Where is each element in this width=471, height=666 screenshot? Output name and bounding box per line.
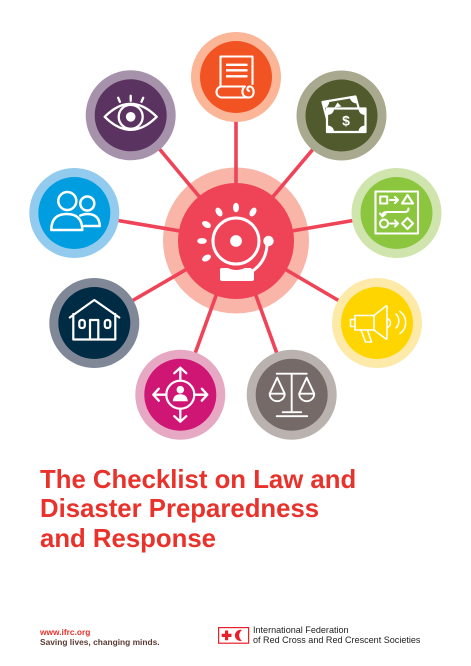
central halo (163, 168, 309, 314)
icon: two people (51, 192, 100, 230)
title: and Response (40, 525, 216, 553)
icon: alarm bell (197, 203, 274, 281)
icon: scroll (216, 56, 254, 98)
node: person with arrows (135, 350, 225, 440)
footer tagline: Saving lives, changing minds. (40, 637, 160, 647)
node: process flow (352, 168, 442, 258)
node: scales of justice (247, 350, 337, 440)
node: banknotes (296, 70, 386, 160)
icon: banknotes: $ (342, 112, 350, 128)
central alarm bell (178, 183, 294, 299)
logo: red cross and red crescent emblem (218, 627, 250, 644)
icon: megaphone (350, 306, 406, 342)
icon: scales (270, 374, 314, 416)
icon: flow chart (376, 192, 418, 234)
organisation name (253, 625, 420, 645)
footer tagline: www.ifrc.org (40, 627, 90, 637)
icon: eye (105, 96, 157, 130)
node: eye (86, 70, 176, 160)
node: megaphone (332, 278, 422, 368)
title: The Checklist on Law and (40, 466, 356, 494)
node: house (49, 278, 139, 368)
title: Disaster Preparedness (40, 495, 319, 523)
organisation name: of Red Cross and Red Crescent Societies (253, 635, 420, 645)
connector lines (74, 77, 397, 395)
icon: person and arrows (153, 368, 207, 422)
title (40, 466, 356, 553)
organisation name: International Federation (253, 625, 349, 635)
footer tagline (40, 627, 160, 647)
node: scroll document (191, 32, 281, 122)
icon: house (70, 300, 119, 340)
node: people (29, 168, 119, 258)
